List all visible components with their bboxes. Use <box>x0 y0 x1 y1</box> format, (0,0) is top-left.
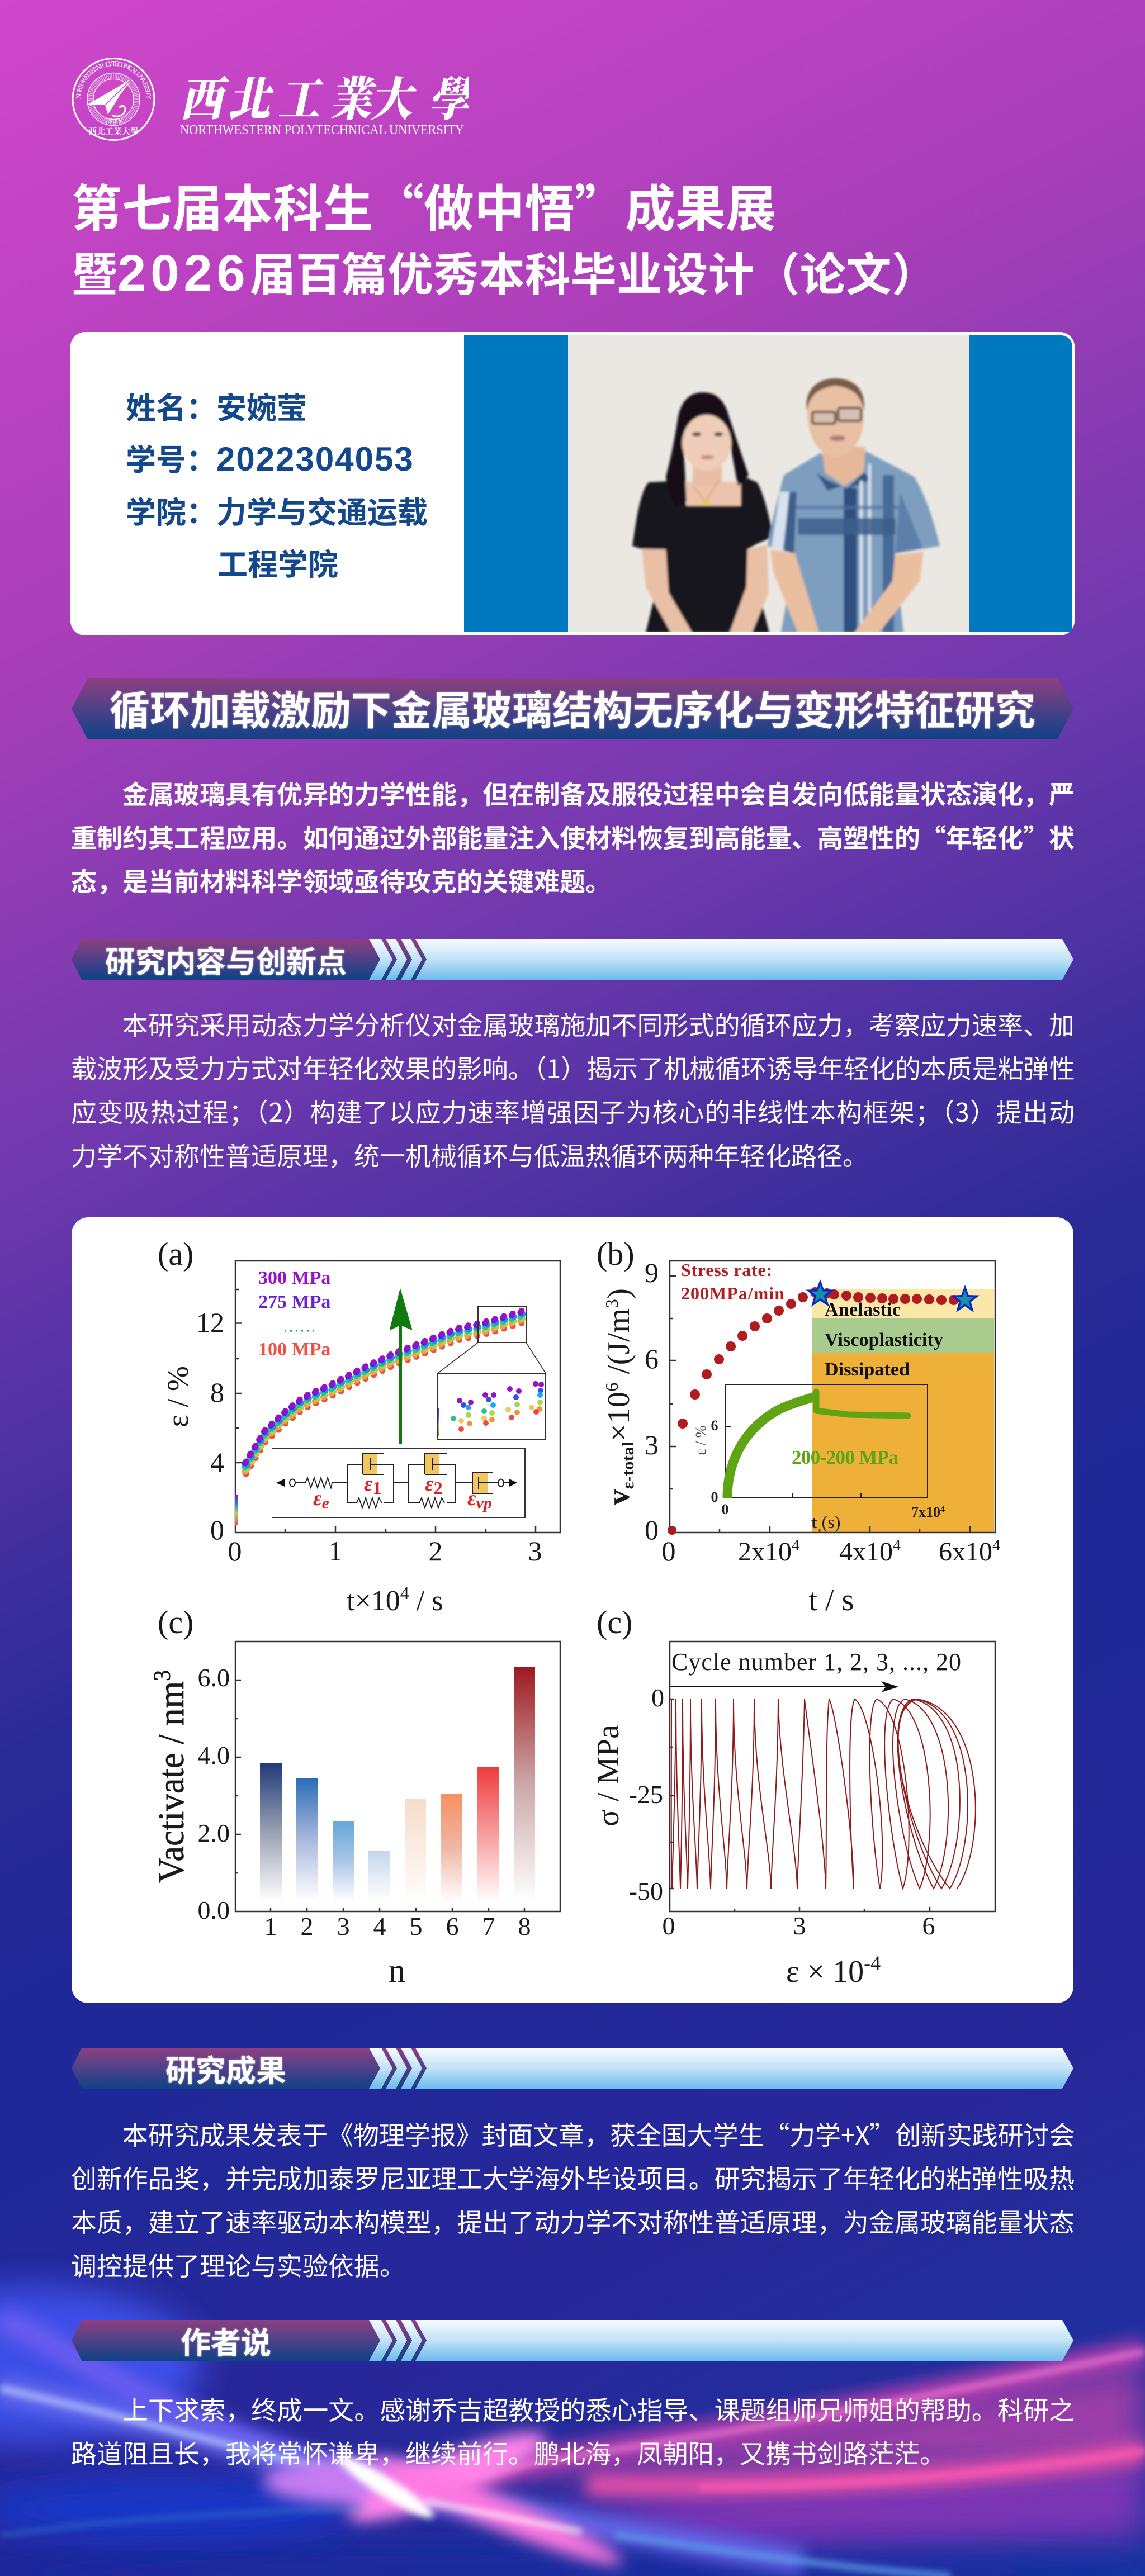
chart (b): energy vs time: 4 <box>893 1537 901 1554</box>
chart (a): strain vs time: 4 <box>400 1583 409 1603</box>
chart (a): strain vs time <box>158 1236 560 1617</box>
chart (d): hysteresis loops: σ / MPa <box>591 1725 626 1827</box>
strain inset: ε / % <box>693 1426 709 1455</box>
logo emblem <box>72 58 155 141</box>
chart (b): energy vs time: (b) <box>597 1236 635 1272</box>
chart (b): energy vs time: 6 <box>602 1383 622 1392</box>
chart (c): activation volume bars: 7 <box>482 1912 495 1941</box>
chart (b): energy vs time: 2x10 <box>738 1537 792 1567</box>
chart (b): energy vs time: ε-total <box>619 1442 637 1489</box>
info: college: 学院：力学与交通运载 <box>126 488 428 532</box>
chart (a): strain vs time: t×10 <box>347 1585 400 1617</box>
chart (c): activation volume bars: 0.0 <box>198 1896 230 1924</box>
banner text: 循环加载激励下金属玻璃结构无序化与变形特征研究 <box>110 678 1035 737</box>
chart (c): activation volume bars: 6.0 <box>198 1663 230 1692</box>
rheological model inset: ε <box>313 1487 322 1510</box>
chart (b): energy vs time: 0 <box>645 1514 659 1545</box>
chart (b): energy vs time: ) <box>602 1288 636 1299</box>
chart (c): activation volume bars: 4.0 <box>198 1741 230 1769</box>
rheological model inset: ε <box>467 1487 476 1510</box>
research paragraph <box>71 1005 1075 1173</box>
chart (b): energy vs time: Viscoplasticity <box>825 1330 943 1350</box>
logo emblem: 1938 <box>104 117 123 125</box>
chart (b): energy vs time: 0 <box>662 1535 675 1567</box>
intro paragraph <box>71 775 1075 899</box>
chart (d): hysteresis loops: 0 <box>662 1911 675 1940</box>
chart (c): activation volume bars: 6 <box>446 1912 458 1941</box>
chart (d): hysteresis loops: -4 <box>864 1952 881 1974</box>
strain inset: 4 <box>940 1505 945 1514</box>
chart (d): hysteresis loops: 6 <box>922 1911 935 1940</box>
chart (b): energy vs time: t / s <box>809 1583 854 1617</box>
cycle arrow <box>670 1682 897 1691</box>
results paragraph: 调控提供了理论与实验依据。 <box>71 2246 405 2283</box>
chart (c): activation volume bars: 8 <box>518 1912 531 1941</box>
chart (c): activation volume bars: 1 <box>264 1912 277 1941</box>
info: student number: 学号：2022304053 <box>126 435 414 480</box>
logo emblem: NORTHWESTERN POLYTECHNICAL UNIVERSITY <box>76 61 151 99</box>
strain inset: 7x10 <box>911 1504 940 1520</box>
chart (d): hysteresis loops: 3 <box>793 1911 806 1940</box>
rheological model inset: vp <box>476 1494 492 1512</box>
chart (b): energy vs time <box>597 1236 1000 1617</box>
chart (c): activation volume bars <box>150 1604 560 1989</box>
chart (c): activation volume bars: (c) <box>158 1604 193 1640</box>
section header: author says <box>72 2318 1073 2362</box>
chart (b): energy vs time: v <box>602 1489 636 1505</box>
chart (a): strain vs time: 100 MPa <box>258 1339 330 1360</box>
chart (d): hysteresis loops: Cycle number 1, 2, 3, ..., 20 <box>671 1648 961 1676</box>
chart (b): energy vs time: 4 <box>792 1537 799 1554</box>
chart (a): strain vs time: 0 <box>210 1514 224 1545</box>
strain inset: 0 <box>721 1501 729 1517</box>
chart (a): strain vs time: 4 <box>210 1446 224 1478</box>
research paragraph: 应变吸热过程；（2）构建了以应力速率增强因子为核心的非线性本构框架；（3）提出动 <box>71 1093 1075 1130</box>
strain inset: 0 <box>711 1489 718 1505</box>
chart (c): activation volume bars: 2 <box>301 1912 313 1941</box>
title line 2: 暨2026届百篇优秀本科毕业设计（论文） <box>72 238 938 304</box>
chart (b): energy vs time: 200MPa/min <box>681 1283 784 1303</box>
university logo <box>72 58 469 141</box>
green arrow <box>392 1294 410 1444</box>
results paragraph: 创新作品奖，并完成加泰罗尼亚理工大学海外毕设项目。研究揭示了年轻化的粘弹性吸热 <box>71 2159 1075 2196</box>
panel: student info card <box>70 332 1075 635</box>
results paragraph: 本质，建立了速率驱动本构模型，提出了动力学不对称性普适原理，为金属玻璃能量状态 <box>71 2203 1075 2240</box>
research paragraph: 力学不对称性普适原理，统一机械循环与低温热循环两种年轻化路径。 <box>71 1136 868 1173</box>
strain inset <box>693 1384 945 1532</box>
zoom inset <box>438 1306 546 1440</box>
chart (b): energy vs time: 3 <box>602 1299 622 1308</box>
chart (b): energy vs time: 4x10 <box>839 1537 893 1567</box>
chart (b): energy vs time: 9 <box>645 1257 659 1288</box>
chart (b): energy vs time: Dissipated <box>825 1359 910 1380</box>
photo: student and supervisor <box>568 335 969 632</box>
panel: charts <box>72 1217 1073 2003</box>
strain inset: 200-200 MPa <box>792 1446 898 1468</box>
info: name: 姓名：安婉莹 <box>126 383 307 428</box>
research paragraph: 载波形及受力方式对年轻化效果的影响。（1）揭示了机械循环诱导年轻化的本质是粘弹性 <box>71 1049 1075 1086</box>
results paragraph: 本研究成果发表于《物理学报》封面文章，获全国大学生“力学+X”创新实践研讨会 <box>122 2115 1075 2152</box>
chart (b): energy vs time: 6 <box>645 1343 659 1374</box>
chart (b): energy vs time: 6x10 <box>939 1537 992 1567</box>
research paragraph: 本研究采用动态力学分析仪对金属玻璃施加不同形式的循环应力，考察应力速率、加 <box>122 1005 1075 1042</box>
chart (c): activation volume bars: n <box>389 1952 405 1989</box>
chart (a): strain vs time: 3 <box>528 1535 542 1567</box>
blue photo backdrop <box>464 335 1072 632</box>
banner shape <box>72 678 1073 739</box>
strain inset: 6 <box>711 1417 718 1434</box>
chart (d): hysteresis loops: (c) <box>597 1604 632 1640</box>
rheological model inset: 2 <box>434 1478 443 1498</box>
chart (b): energy vs time: ×10 <box>602 1392 636 1441</box>
man <box>768 451 940 633</box>
chart (c): activation volume bars: 3 <box>150 1670 176 1681</box>
title line 1: 第七届本科生“做中悟”成果展 <box>72 168 776 241</box>
intro paragraph: 金属玻璃具有优异的力学性能，但在制备及服役过程中会自发向低能量状态演化，严 <box>122 775 1075 812</box>
chart (c): activation volume bars: 3 <box>337 1912 350 1941</box>
rheological model inset <box>272 1448 525 1517</box>
chart (b): energy vs time: 3 <box>645 1429 659 1460</box>
chart (d): hysteresis loops: -50 <box>629 1877 663 1905</box>
intro paragraph: 重制约其工程应用。如何通过外部能量注入使材料恢复到高能量、高塑性的“年轻化”状 <box>71 818 1075 855</box>
author paragraph <box>71 2390 1075 2471</box>
rheological model inset: ε <box>364 1472 373 1496</box>
chart (a): strain vs time: 300 MPa <box>258 1268 330 1288</box>
chart (c): activation volume bars: 2.0 <box>198 1819 230 1847</box>
chart (b): energy vs time: /(J/m <box>602 1308 636 1382</box>
chart (c): activation volume bars: 5 <box>409 1912 423 1941</box>
bars <box>260 1667 535 1901</box>
chart (b): energy vs time: Stress rate: <box>681 1260 772 1280</box>
chart (d): hysteresis loops: 0 <box>651 1683 664 1712</box>
rheological model inset: ε <box>425 1472 434 1496</box>
intro paragraph: 态，是当前材料科学领域亟待攻克的关键难题。 <box>71 862 611 899</box>
chart (a): strain vs time: 12 <box>196 1307 224 1338</box>
logo emblem: 西北工業大學 <box>88 125 139 137</box>
chart (c): activation volume bars: 4 <box>373 1912 386 1941</box>
chart (d): hysteresis loops: ε × 10 <box>786 1954 864 1989</box>
project title banner <box>72 678 1073 739</box>
strain inset: t (s) <box>811 1512 840 1532</box>
woman <box>632 475 773 633</box>
section header: research content <box>72 937 1073 981</box>
header text: 研究成果 <box>165 2046 286 2090</box>
chart (a): strain vs time: 275 MPa <box>258 1292 330 1312</box>
author paragraph: 上下求索，终成一文。感谢乔吉超教授的悉心指导、课题组师兄师姐的帮助。科研之 <box>122 2390 1075 2427</box>
chart (a): strain vs time: (a) <box>158 1236 193 1272</box>
chart (a): strain vs time: 1 <box>329 1535 342 1567</box>
author paragraph: 路道阻且长，我将常怀谦卑，继续前行。鹏北海，凤朝阳，又携书剑路茫茫。 <box>71 2434 945 2471</box>
chart (a): strain vs time: 0 <box>228 1535 242 1567</box>
chart (a): strain vs time: 2 <box>428 1535 443 1567</box>
chart (b): energy vs time: 4 <box>992 1537 1000 1554</box>
info: college line 2: 工程学院 <box>217 540 338 584</box>
chart (c): activation volume bars: Vactivate / nm <box>151 1670 192 1883</box>
header text: 研究内容与创新点 <box>105 937 347 981</box>
results paragraph <box>71 2115 1075 2283</box>
section header: results <box>72 2046 1073 2090</box>
chart (a): strain vs time: 8 <box>210 1377 224 1408</box>
chart (d): hysteresis loops: -25 <box>629 1780 663 1809</box>
chart (b): energy vs time: Anelastic <box>825 1299 901 1320</box>
rheological model inset: e <box>322 1494 329 1512</box>
chart (d): hysteresis loops <box>591 1604 995 1989</box>
chart (a): strain vs time: / s <box>409 1585 443 1617</box>
rheological model inset: 1 <box>373 1478 382 1498</box>
header text: 作者说 <box>181 2318 271 2362</box>
chart (a): strain vs time: ε / % <box>161 1366 195 1427</box>
